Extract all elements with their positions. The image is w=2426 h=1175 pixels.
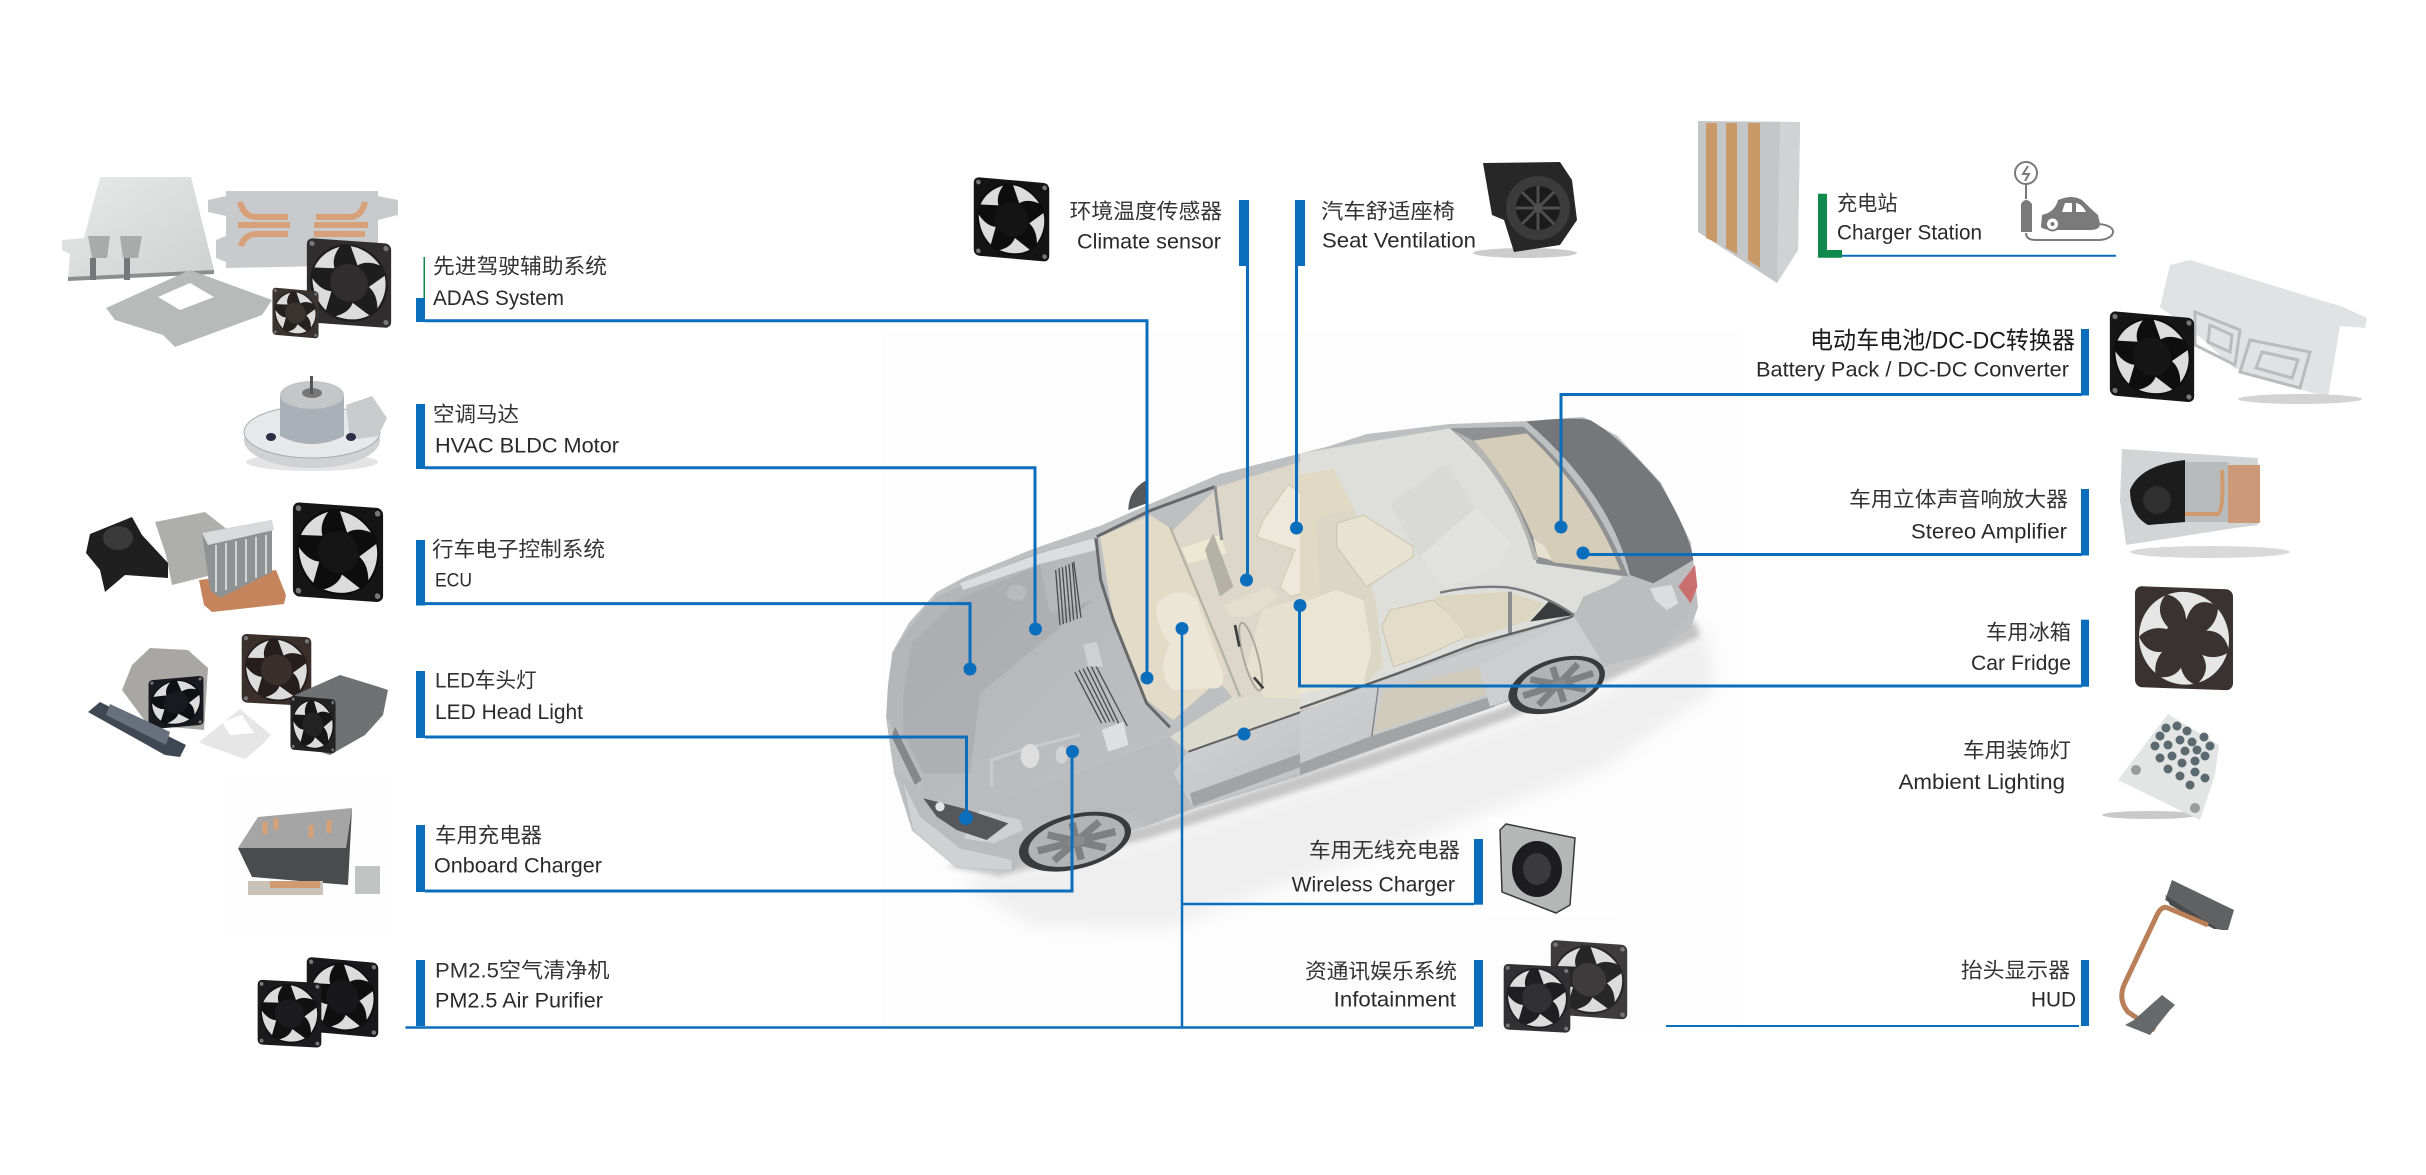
label: Charger Station: Charger Station — [1837, 222, 1982, 244]
door panel — [1173, 702, 1333, 808]
rear head rest — [1533, 538, 1552, 560]
leader line: HVAC — [425, 468, 1042, 636]
fender highlight — [963, 810, 1023, 843]
rear glass — [1473, 433, 1621, 570]
hood top edge highlight — [960, 538, 1097, 590]
window arc — [1440, 587, 1574, 615]
leader line: PM2.5 to infotainment — [406, 1026, 1474, 1029]
steering wheel — [1235, 621, 1267, 692]
centre console — [1205, 533, 1233, 597]
driver seat back — [1257, 485, 1317, 597]
fan — [288, 502, 386, 609]
bracket plate — [106, 270, 272, 347]
product: PM2.5 fans — [254, 956, 380, 1052]
label: Wireless Charger: Wireless Charger — [1292, 874, 1455, 896]
upper hood vent — [1056, 562, 1081, 625]
roof pillar — [1215, 487, 1222, 540]
heat-pipe plate — [208, 191, 398, 268]
rear bench grey — [1390, 463, 1477, 560]
blower — [86, 517, 168, 592]
beige lower door — [1373, 667, 1490, 733]
front fender — [898, 737, 1193, 870]
label: Battery Pack / DC-DC Converter: Battery Pack / DC-DC Converter — [1756, 358, 2069, 382]
product: climate sensor fan — [970, 177, 1052, 268]
label: Infotainment — [1305, 960, 1483, 1027]
driver seat cushion — [1223, 587, 1280, 617]
rear wheel — [1501, 645, 1612, 725]
front wheel — [1013, 801, 1137, 882]
product: battery cold plate and fan — [2105, 260, 2367, 409]
label: Ambient Lighting: Ambient Lighting — [1898, 771, 2065, 794]
floor reflection — [960, 625, 1715, 930]
label: ADAS System: 先进驾驶辅助系统 — [433, 256, 607, 278]
cabin interior base — [1173, 452, 1333, 717]
rear half of car — [1300, 419, 1697, 775]
side mirror — [1128, 480, 1147, 510]
leader line: LED — [425, 737, 973, 825]
front door glass — [1170, 697, 1330, 752]
label: Stereo Amplifier: 车用立体声音响放大器 — [1849, 488, 2068, 512]
rear fender — [1478, 617, 1602, 707]
label: ECU: 行车电子控制系统 — [432, 538, 605, 562]
sill — [1300, 697, 1495, 775]
leader line: seat ventilation — [1290, 266, 1303, 534]
label: Car Fridge — [1971, 620, 2089, 687]
hood — [887, 537, 1170, 813]
front half of car — [887, 452, 1333, 882]
heat pipe block — [155, 512, 228, 585]
window pillar — [1504, 592, 1516, 633]
big fan — [302, 238, 394, 334]
label: Car Fridge: 车用冰箱 — [1986, 622, 2071, 644]
rear glass surround — [1450, 427, 1628, 577]
hood dark engine area — [903, 565, 1093, 773]
product: car fridge fan — [2135, 586, 2233, 690]
label: ECU: ECU — [435, 570, 472, 592]
product: wireless charger blower — [1488, 817, 1618, 917]
leader line: climate sensor — [1240, 266, 1253, 586]
cabin light band — [1182, 535, 1227, 563]
small fan — [270, 287, 320, 342]
rear end — [1574, 560, 1697, 663]
label: Charger Station: 充电站 — [1837, 192, 1898, 216]
aluminium cold plate — [2160, 260, 2367, 398]
tan panel — [1300, 468, 1355, 607]
label: Stereo Amplifier — [1849, 488, 2089, 556]
contact shadow — [945, 620, 1700, 876]
fin bar — [88, 702, 186, 757]
label: Seat Ventilation — [1295, 200, 1476, 266]
passenger seat back — [1307, 600, 1333, 653]
product: ECU blower, heat sink and fan — [86, 502, 386, 612]
leader line: wireless charger and infotainment trunk — [1176, 622, 1474, 1028]
label: HVAC BLDC Motor — [416, 404, 619, 469]
car body silhouette — [887, 418, 1697, 870]
floor beige — [1315, 510, 1383, 683]
belt line — [1300, 617, 1573, 708]
label: Wireless Charger — [1292, 839, 1483, 905]
leader line: ADAS — [425, 321, 1154, 684]
label: LED Head Light — [416, 670, 583, 738]
dashboard line — [1170, 527, 1247, 713]
tail light — [1678, 565, 1697, 603]
label: ADAS System: ADAS System — [433, 287, 564, 310]
label: Climate sensor: Climate sensor — [1077, 230, 1221, 254]
bumper highlight — [903, 783, 1012, 870]
label: Ambient Lighting: 车用装饰灯 — [1963, 740, 2071, 762]
icon: EV charging station — [2015, 162, 2113, 240]
label: Onboard Charger: 车用充电器 — [435, 824, 542, 848]
label: Charger Station — [1818, 192, 2116, 258]
label: Infotainment: Infotainment — [1334, 988, 1456, 1012]
windshield frame — [1096, 487, 1215, 727]
product: onboard charger heat sink — [227, 777, 387, 937]
product: stereo amplifier module — [2120, 449, 2290, 558]
label: Onboard Charger — [416, 824, 602, 892]
trunk lid — [1527, 419, 1693, 583]
product: LED head light cooling parts — [88, 634, 388, 759]
label: Car Fridge: Car Fridge — [1971, 652, 2071, 675]
leader line: stereo amplifier — [1576, 546, 2082, 560]
lower rear seat — [1382, 600, 1467, 667]
car illustration — [887, 418, 1715, 930]
label: LED Head Light: LED车头灯 — [435, 670, 536, 692]
blower heat sink — [295, 675, 388, 755]
leader line: car fridge — [1294, 599, 2082, 686]
front seat seen through windshield — [1156, 592, 1223, 690]
heat sink with fan — [122, 648, 208, 730]
lower hood vent — [1075, 664, 1127, 726]
label: Infotainment: 资通讯娱乐系统 — [1305, 960, 1457, 984]
label: HUD: HUD — [2031, 988, 2076, 1012]
label: ECU — [416, 538, 605, 606]
copper base — [199, 570, 286, 612]
grille — [892, 727, 922, 785]
label: Onboard Charger: Onboard Charger — [434, 854, 602, 878]
leader line: onboard charger — [425, 745, 1079, 891]
engine bay plumbing — [992, 735, 1080, 787]
rear bench grey right — [1420, 507, 1510, 587]
leader line: HUD segment — [1666, 1025, 2079, 1027]
product: seat ventilation blower — [1473, 162, 1577, 258]
door sill — [1190, 742, 1333, 807]
door seam — [1370, 687, 1378, 750]
brown fan — [238, 634, 313, 711]
leader line: battery pack — [1554, 394, 2082, 534]
headlight — [923, 798, 1008, 840]
plate — [1650, 585, 1678, 610]
door dot — [1238, 728, 1250, 740]
label: LED Head Light: LED Head Light — [435, 701, 583, 724]
label: HVAC BLDC Motor: HVAC BLDC Motor — [435, 434, 619, 458]
label: ADAS System — [416, 256, 607, 322]
label: PM2.5 Air Purifier: PM2.5 Air Purifier — [435, 990, 603, 1012]
product: ADAS cold plates and fans — [62, 177, 398, 347]
faint car photo background — [882, 332, 1738, 1032]
label: Stereo Amplifier: Stereo Amplifier — [1911, 520, 2067, 544]
label: Battery Pack / DC-DC Converter: 电动车电池/DC-DC转换器 — [1810, 328, 2075, 354]
label: Seat Ventilation: Seat Ventilation — [1322, 230, 1476, 252]
label: HUD — [1961, 960, 2089, 1026]
door panel — [1300, 617, 1610, 775]
leader line: ECU — [425, 604, 976, 676]
product: ambient lighting pin-fin plate — [2102, 714, 2219, 820]
belt line — [1188, 701, 1333, 752]
product: HUD heat pipe and sink — [2122, 880, 2234, 1035]
product: infotainment fans — [1500, 940, 1630, 1038]
label: Ambient Lighting — [1898, 740, 2071, 794]
plate with nozzles — [62, 177, 214, 281]
label: HVAC BLDC Motor: 空调马达 — [433, 404, 519, 426]
label: PM2.5 Air Purifier — [416, 960, 610, 1026]
rear side glass — [1433, 592, 1543, 640]
windshield — [1100, 515, 1227, 720]
passenger seat base — [1247, 588, 1333, 710]
rear left seat — [1337, 515, 1413, 587]
white panel near vent — [1102, 722, 1128, 752]
product: charger station cold plate — [1698, 121, 1800, 283]
rear cabin shade — [1453, 430, 1538, 560]
label: HUD: 抬头显示器 — [1961, 960, 2070, 982]
label: Climate sensor — [1070, 200, 1249, 266]
product: HVAC BLDC motor — [244, 376, 387, 471]
rear cabin base — [1300, 428, 1623, 708]
fin stack — [202, 520, 272, 598]
black axial fan — [2105, 311, 2197, 409]
label: Seat Ventilation: 汽车舒适座椅 — [1321, 200, 1455, 224]
white lens — [199, 709, 271, 759]
label: PM2.5 Air Purifier: PM2.5空气清净机 — [435, 960, 610, 982]
label: Battery Pack / DC-DC Converter — [1756, 328, 2089, 396]
label: Climate sensor: 环境温度传感器 — [1070, 200, 1222, 224]
steering wheel dark spokes — [1235, 625, 1263, 688]
label: Wireless Charger: 车用无线充电器 — [1309, 840, 1460, 862]
dark quarter window — [1530, 600, 1574, 622]
seat edge front — [1300, 590, 1372, 693]
